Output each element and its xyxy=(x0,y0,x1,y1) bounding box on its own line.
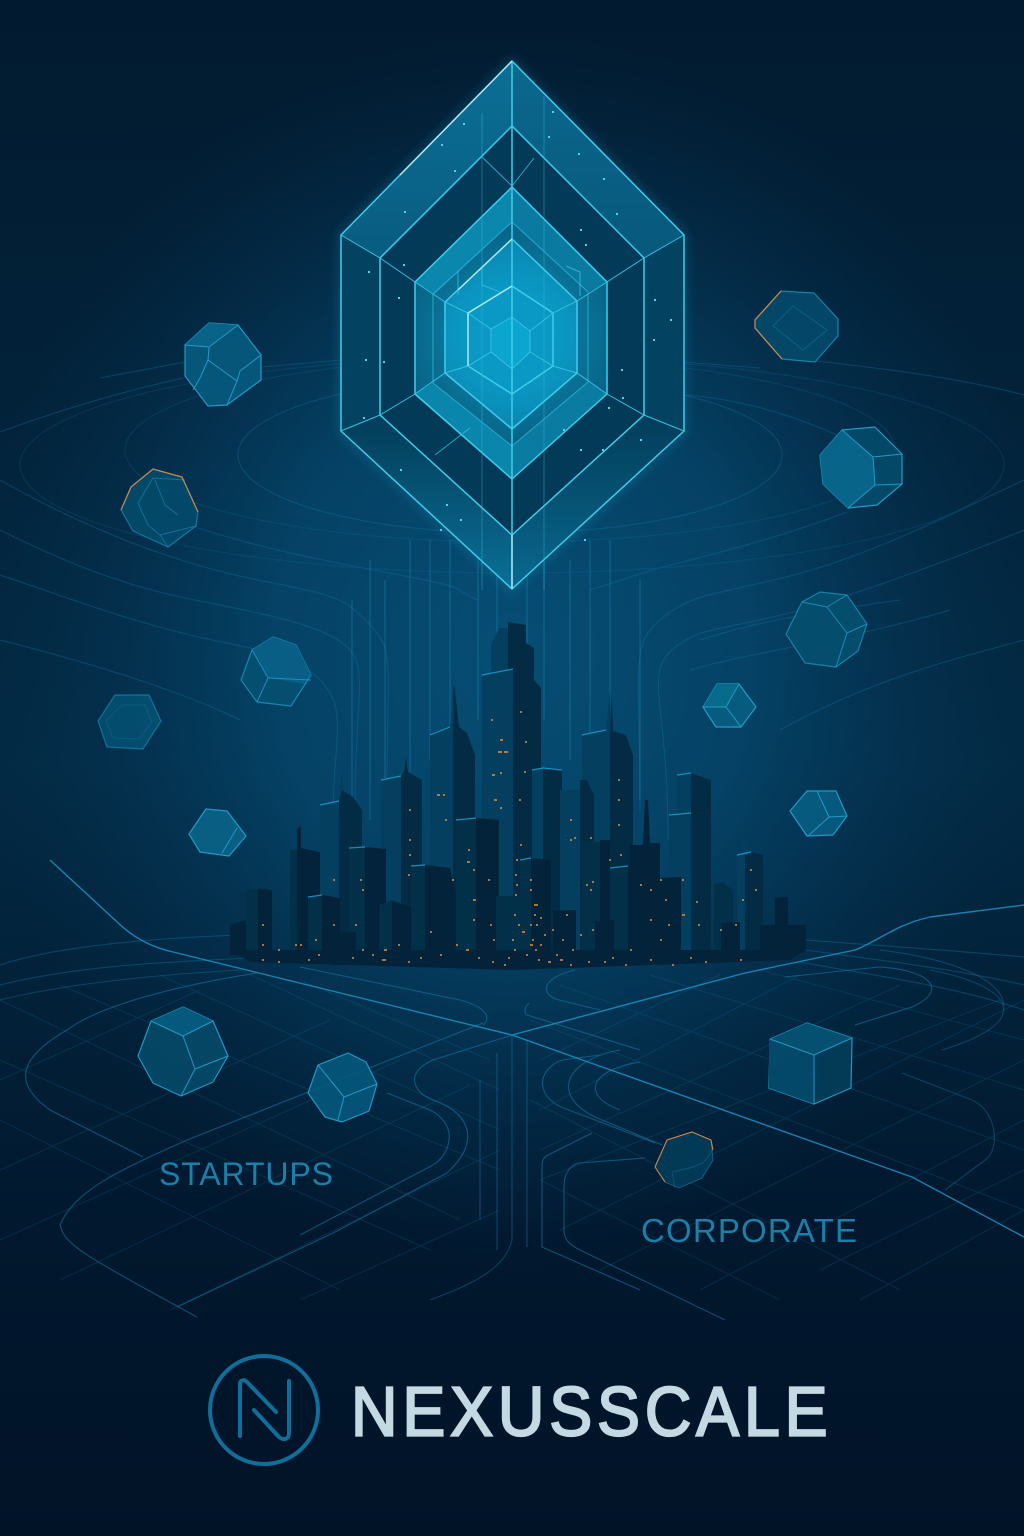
polyhedron lower left large xyxy=(138,1007,228,1096)
polyhedron left 4 xyxy=(98,695,161,749)
second shell xyxy=(380,126,644,535)
label: startups: STARTUPS xyxy=(159,1156,333,1192)
logo xyxy=(210,1356,828,1464)
polyhedron right 5 xyxy=(790,791,847,836)
crystal highlights xyxy=(400,61,512,589)
polyhedron lower left small xyxy=(308,1053,377,1122)
crystal particles xyxy=(363,112,672,540)
polyhedron right 3 xyxy=(786,592,867,667)
polyhedron left 2 orange edge xyxy=(121,469,198,547)
bright crossing route xyxy=(50,860,1024,1237)
upper circuit contour lines xyxy=(0,357,1024,840)
polyhedron left 3 xyxy=(241,637,311,706)
label: corporate: CORPORATE xyxy=(641,1212,857,1249)
third shell xyxy=(415,187,607,479)
polyhedron right 4 xyxy=(703,684,756,727)
polyhedron left 1 xyxy=(185,323,261,406)
polyhedron left 5 xyxy=(189,809,246,856)
logo icon xyxy=(210,1356,318,1464)
back row towers xyxy=(320,622,763,960)
floating polyhedra xyxy=(98,291,902,1188)
front row towers xyxy=(230,800,806,970)
cube lower right xyxy=(769,1023,852,1104)
skyline xyxy=(230,622,806,970)
main crystal polyhedron xyxy=(341,61,684,590)
ground circuit routes xyxy=(26,950,1004,1320)
outer shell xyxy=(341,61,684,589)
rooftop highlights xyxy=(308,669,751,897)
ground circuit grid xyxy=(0,970,1024,1310)
crystal glow xyxy=(341,61,684,589)
wordmark: NEXUSSCALE xyxy=(351,1373,828,1451)
polyhedron right 2 xyxy=(820,427,902,508)
polyhedron right 1 orange edge xyxy=(755,291,838,362)
inner core xyxy=(468,286,553,394)
vertical data streams xyxy=(352,130,640,860)
polyhedron lower right orange edge xyxy=(655,1132,713,1188)
horizon contour lines xyxy=(0,935,1024,1010)
fourth shell xyxy=(445,239,577,429)
glowing windows xyxy=(262,712,757,965)
wireframe edges xyxy=(341,61,684,590)
